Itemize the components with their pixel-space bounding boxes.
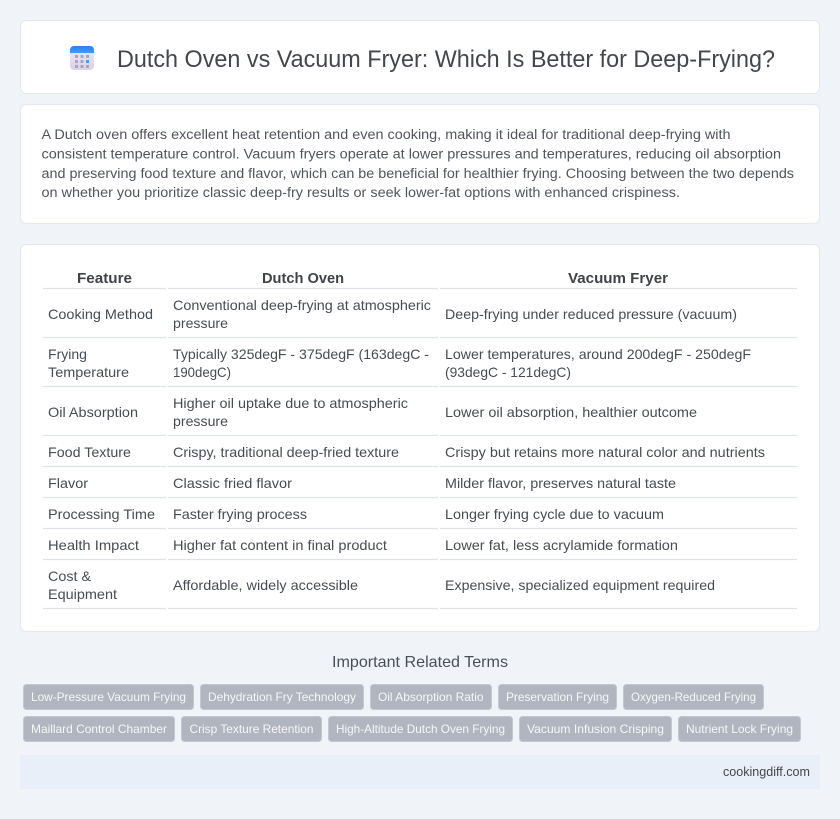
row: health impact: Higher fat content in final product: [173, 537, 387, 553]
tag: [328, 716, 512, 742]
row: cooking method: Conventional deep-frying at atmospheric: [173, 297, 431, 313]
tag: Vacuum Infusion Crisping: [527, 722, 664, 736]
row: frying temperature: Typically 325degF - 375degF (163degC -: [173, 346, 429, 362]
row: cooking method: pressure: [173, 315, 228, 331]
tag: [678, 716, 800, 742]
row: cost and equipment: [48, 568, 715, 602]
panel: introduction: [20, 104, 820, 224]
tag: [520, 716, 672, 742]
tag: [624, 684, 764, 710]
row: flavor: Milder flavor, preserves natural taste: [445, 475, 676, 491]
tag: [370, 684, 492, 710]
row: health impact: Lower fat, less acrylamide formation: [445, 537, 678, 553]
intro text: consistent temperature control. Vacuum fryers operate at lower pressures and temperatures, reducing oil absorption: [42, 146, 781, 162]
table header: Dutch Oven: [262, 271, 344, 287]
row: food texture: [48, 444, 765, 460]
row: processing time: [48, 506, 664, 522]
tag: [182, 716, 322, 742]
related term tags: [24, 684, 800, 742]
tag: Oxygen-Reduced Frying: [631, 690, 756, 704]
row: frying temperature: Lower temperatures, around 200degF - 250degF: [445, 346, 751, 362]
table header: [77, 271, 668, 287]
row: cooking method: Deep-frying under reduced pressure (vacuum): [445, 306, 737, 322]
table header: Vacuum Fryer: [568, 271, 668, 287]
row: health impact: [48, 537, 678, 553]
tag: [24, 684, 194, 710]
row: oil absorption: Oil Absorption: [48, 404, 138, 420]
footer bar: [20, 755, 820, 789]
row: frying temperature: Frying: [48, 346, 87, 362]
row: cost and equipment: Affordable, widely accessible: [173, 577, 358, 593]
row: frying temperature: Temperature: [48, 364, 129, 380]
row: cost and equipment: Cost &: [48, 568, 92, 584]
row: frying temperature: [48, 346, 751, 380]
tag: Dehydration Fry Technology: [208, 690, 356, 704]
row: oil absorption: pressure: [173, 413, 228, 429]
tag: High-Altitude Dutch Oven Frying: [336, 722, 505, 736]
row: flavor: [48, 475, 676, 491]
row: food texture: Crispy, traditional deep-fried texture: [173, 444, 399, 460]
row: cost and equipment: Expensive, specialized equipment required: [445, 577, 715, 593]
row: cooking method: Cooking Method: [48, 306, 153, 322]
intro text: A Dutch oven offers excellent heat retention and even cooking, making it ideal for traditional deep-frying with: [42, 127, 730, 143]
row: cooking method: [48, 297, 737, 331]
tag: Nutrient Lock Frying: [686, 722, 793, 736]
row: flavor: Flavor: [48, 475, 88, 491]
row: food texture: Food Texture: [48, 444, 131, 460]
heading: important related terms: Important Related Terms: [332, 654, 508, 671]
tag: [24, 716, 174, 742]
row: processing time: Faster frying process: [173, 506, 307, 522]
row: flavor: Classic fried flavor: [173, 475, 292, 491]
tag: [200, 684, 364, 710]
tag: Preservation Frying: [506, 690, 609, 704]
tag: Low-Pressure Vacuum Frying: [31, 690, 186, 704]
tag: Oil Absorption Ratio: [378, 690, 484, 704]
row: oil absorption: Higher oil uptake due to atmospheric: [173, 395, 408, 411]
row: health impact: Health Impact: [48, 537, 139, 553]
footer source: cookingdiff.com: [723, 765, 810, 779]
tag: Maillard Control Chamber: [31, 722, 167, 736]
row: oil absorption: [48, 395, 697, 429]
row: oil absorption: Lower oil absorption, healthier outcome: [445, 404, 697, 420]
row: processing time: Longer frying cycle due to vacuum: [445, 506, 664, 522]
intro text: [42, 127, 794, 201]
row: food texture: Crispy but retains more natural color and nutrients: [445, 444, 765, 460]
panel: comparison table: [20, 244, 820, 632]
title: Dutch Oven vs Vacuum Fryer: Which Is Better for Deep-Frying?: [117, 46, 775, 73]
panel: header: [20, 20, 820, 94]
row: frying temperature: (93degC - 121degC): [445, 364, 571, 380]
intro text: and preserving food texture and flavor, which can be beneficial for healthier frying. Choosing between the two depends: [42, 166, 794, 182]
icon: calendar: [70, 46, 94, 70]
tag: [498, 684, 616, 710]
tag: Crisp Texture Retention: [190, 722, 314, 736]
row: processing time: Processing Time: [48, 506, 155, 522]
row: frying temperature: 190degC): [173, 364, 231, 380]
intro text: on whether you prioritize classic deep-fry results or seek lower-fat options with enhanced crispiness.: [42, 185, 680, 201]
table header: Feature: [77, 271, 132, 287]
row: cost and equipment: Equipment: [48, 586, 117, 602]
